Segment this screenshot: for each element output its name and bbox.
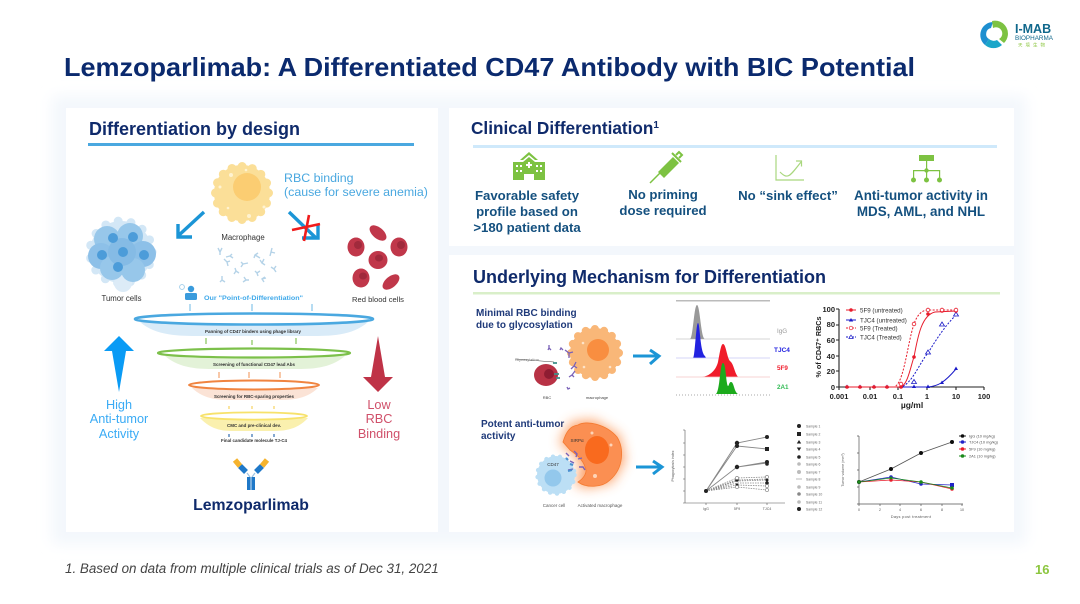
chart: percent CD47 positive RBCs: 40 bbox=[827, 352, 835, 361]
series: TJC4 untreated bbox=[847, 369, 956, 387]
diagram: RBC and macrophage: macrophage bbox=[586, 395, 609, 400]
diagram: cancer cell and activated macrophage: SIRPα bbox=[570, 438, 584, 443]
funnel stage 3: RBC-sparing screening bbox=[189, 380, 319, 400]
diagram: cancer cell and activated macrophage: CD47 bbox=[547, 462, 559, 467]
chart: percent CD47 positive RBCs: % of CD47⁺ RBCs bbox=[814, 317, 823, 377]
label: high anti-tumor activity: Activity bbox=[99, 427, 140, 441]
text: potent anti-tumor activity: Potent anti-tumor bbox=[481, 419, 564, 430]
diagram: RBC and macrophage bbox=[515, 328, 620, 400]
series: TJC4 treated bbox=[847, 315, 956, 387]
series: 5F9 untreated bbox=[847, 311, 956, 387]
heading: differentiation by design: Differentiation by design bbox=[89, 119, 300, 139]
text: minimal RBC binding: due to glycosylation bbox=[476, 320, 573, 331]
label: low RBC binding: Binding bbox=[358, 427, 400, 441]
chart: phagocytosis index bbox=[671, 430, 785, 511]
chart legend: phagocytosis samples: Sample 6 bbox=[806, 462, 820, 466]
label: tumor cells: Tumor cells bbox=[101, 294, 142, 303]
chart legend: phagocytosis samples: Sample 3 bbox=[806, 440, 820, 444]
chart: phagocytosis index: IgG bbox=[703, 507, 709, 511]
panel: differentiation by design bbox=[66, 108, 438, 532]
funnel stage 4: CMC: CMC and pre-clinical dev. bbox=[227, 423, 282, 429]
funnel bbox=[135, 304, 373, 444]
chart legend: phagocytosis samples: Sample 11 bbox=[806, 500, 822, 504]
chart: phagocytosis index: Phagocytosis index bbox=[671, 450, 675, 481]
logo: I-MAB Biopharma bbox=[980, 21, 1053, 48]
chart legend: phagocytosis samples: Sample 12 bbox=[806, 508, 822, 512]
chart: tumor growth: 10 bbox=[960, 508, 964, 512]
label: red blood cells: Red blood cells bbox=[352, 295, 404, 304]
diagram: RBC and macrophage: Glycosylation bbox=[515, 357, 539, 362]
chart: tumor growth: 0 bbox=[858, 508, 860, 512]
label: macrophage: Macrophage bbox=[221, 233, 265, 242]
text: anti-tumor activity: MDS, AML, and NHL bbox=[857, 204, 985, 219]
chart legend: tumor growth: IgG (10 mg/kg) bbox=[969, 434, 996, 438]
text: minimal RBC binding: Minimal RBC binding bbox=[476, 308, 577, 319]
chart: flow cytometry histogram: 2A1 bbox=[777, 384, 789, 391]
arrow: to red blood cells, crossed out bbox=[289, 212, 320, 241]
chart legend: TJC4 (Treated) bbox=[860, 334, 902, 342]
chart: percent CD47 positive RBCs: 60 bbox=[827, 336, 835, 345]
chart: percent CD47 positive RBCs: 1 bbox=[925, 392, 929, 401]
chart legend: phagocytosis samples: Sample 2 bbox=[806, 432, 820, 436]
chart: percent CD47 positive RBCs: 0.001 bbox=[830, 392, 848, 401]
chart legend: phagocytosis samples: Sample 5 bbox=[806, 456, 820, 460]
title: Lemzoparlimab: A Differentiated CD47 Antibody with BIC Potential bbox=[64, 54, 915, 82]
chart: percent CD47 positive RBCs bbox=[814, 305, 990, 410]
panel: underlying mechanism bbox=[449, 255, 1014, 532]
panel: clinical differentiation bbox=[449, 108, 1014, 246]
chart: percent CD47 positive RBCs: 100 bbox=[978, 392, 990, 401]
funnel stage 1: panning bbox=[135, 314, 373, 336]
chart legend: phagocytosis samples: Sample 9 bbox=[806, 486, 820, 490]
text: anti-tumor activity: Anti-tumor activity in bbox=[854, 188, 988, 203]
funnel stage 1: panning: Panning of CD47 binders using phage library bbox=[205, 329, 301, 335]
logo: I-MAB Biopharma: 天境生物 bbox=[1018, 42, 1048, 48]
text: potent anti-tumor activity: activity bbox=[481, 431, 516, 442]
chart legend: tumor growth bbox=[959, 434, 999, 458]
chart legend: phagocytosis samples: Sample 4 bbox=[806, 448, 820, 452]
chart legend: 5F9 (untreated) bbox=[860, 308, 903, 314]
icon: tumor cells bbox=[88, 221, 156, 292]
logo: I-MAB Biopharma: I-MAB bbox=[1015, 22, 1051, 36]
icon: person with idea bbox=[180, 285, 197, 300]
chart: tumor growth: 6 bbox=[920, 508, 922, 512]
icon: syringe bbox=[650, 152, 682, 183]
text: favorable safety: profile based on bbox=[476, 204, 578, 219]
arrow: to histogram bbox=[633, 350, 659, 364]
text: no sink effect: No “sink effect” bbox=[738, 188, 838, 203]
funnel stage 3: RBC-sparing screening: Screening for RBC-sparing properties bbox=[214, 394, 294, 400]
chart legend: tumor growth: 2A1 (10 mg/kg) bbox=[969, 454, 996, 458]
series: 5F9 treated bbox=[847, 310, 956, 387]
heading: clinical differentiation: 1 bbox=[653, 120, 659, 131]
chart: percent CD47 positive RBCs: 0 bbox=[831, 383, 835, 392]
funnel stage 2: functional screening bbox=[158, 348, 350, 369]
chart legend: tumor growth: TJC4 (10 mg/kg) bbox=[969, 440, 999, 444]
chart: tumor growth: 2 bbox=[879, 508, 881, 512]
funnel stage 2: functional screening: Screening of functional CD47 lead Abs bbox=[213, 362, 295, 368]
label: lemzoparlimab: Lemzoparlimab bbox=[193, 497, 309, 514]
icon: macrophage bbox=[214, 165, 270, 221]
label: point of differentiation: Our "Point-of-Differentiation" bbox=[204, 295, 303, 302]
chart legend: TJC4 (untreated) bbox=[860, 318, 907, 324]
chart: tumor growth: Days post treatment bbox=[891, 514, 932, 519]
chart: tumor growth: Tumor volume (mm³) bbox=[841, 453, 845, 487]
chart: tumor growth: 4 bbox=[899, 508, 901, 512]
chart legend: phagocytosis samples: Sample 8 bbox=[806, 478, 820, 482]
chart legend bbox=[846, 308, 907, 342]
chart: flow cytometry histogram: TJC4 bbox=[774, 347, 790, 354]
page number: 16 bbox=[1035, 562, 1049, 577]
icon: free antibodies bbox=[218, 248, 276, 282]
logo: I-MAB Biopharma: BIOPHARMA bbox=[1015, 36, 1053, 42]
chart: percent CD47 positive RBCs: 0.01 bbox=[863, 392, 877, 401]
chart: flow cytometry histogram: 5F9 bbox=[777, 365, 788, 372]
text: no priming: No priming bbox=[628, 187, 698, 202]
chart legend: phagocytosis samples bbox=[796, 424, 822, 512]
label: low RBC binding: RBC bbox=[366, 412, 392, 426]
label: RBC binding: (cause for severe anemia) bbox=[284, 185, 428, 199]
diagram: cancer cell and activated macrophage bbox=[537, 423, 623, 508]
icon: hospital bbox=[513, 152, 545, 180]
icon: antibody bbox=[235, 460, 267, 490]
arrow: to tumor cells bbox=[178, 212, 204, 237]
icon: org tree bbox=[911, 155, 942, 182]
funnel stage 4: CMC bbox=[200, 412, 308, 431]
chart: flow cytometry histogram: IgG bbox=[777, 328, 787, 335]
chart: percent CD47 positive RBCs: 10 bbox=[952, 392, 960, 401]
chart: flow cytometry histogram bbox=[676, 300, 790, 395]
chart legend: 5F9 (Treated) bbox=[860, 326, 898, 332]
diagram: RBC and macrophage: RBC bbox=[543, 395, 551, 400]
text: favorable safety: Favorable safety bbox=[475, 188, 580, 203]
heading: clinical differentiation: Clinical Differentiation bbox=[471, 118, 653, 138]
arrow: to tumor data bbox=[636, 461, 662, 474]
funnel result: Final candidate molecule TJ-C4 bbox=[221, 438, 287, 444]
diagram: cancer cell and activated macrophage: Activated macrophage bbox=[578, 503, 623, 508]
chart legend: phagocytosis samples: Sample 10 bbox=[806, 492, 822, 496]
icon: red blood cells bbox=[348, 222, 408, 293]
chart legend: phagocytosis samples: Sample 7 bbox=[806, 470, 820, 474]
chart: percent CD47 positive RBCs: 80 bbox=[827, 320, 835, 329]
chart: tumor growth: 8 bbox=[941, 508, 943, 512]
arrow: high anti-tumor bbox=[104, 336, 134, 392]
label: high anti-tumor activity: High bbox=[106, 398, 132, 412]
label: low RBC binding: Low bbox=[367, 398, 391, 412]
chart: percent CD47 positive RBCs: 100 bbox=[822, 305, 835, 314]
chart: percent CD47 positive RBCs: 0.1 bbox=[893, 392, 903, 401]
chart: phagocytosis index: 5F9 bbox=[734, 507, 740, 511]
chart: percent CD47 positive RBCs: µg/ml bbox=[901, 400, 923, 410]
arrow: low RBC binding bbox=[363, 336, 393, 392]
footnote: 1. Based on data from multiple clinical trials as of Dec 31, 2021 bbox=[65, 561, 439, 576]
icon: flat line chart bbox=[776, 155, 804, 180]
heading: underlying mechanism: Underlying Mechanism for Differentiation bbox=[473, 267, 826, 287]
chart: tumor growth bbox=[841, 436, 964, 519]
text: favorable safety: >180 patient data bbox=[473, 220, 581, 235]
label: high anti-tumor activity: Anti-tumor bbox=[90, 412, 149, 426]
chart: phagocytosis index: TJC4 bbox=[763, 507, 771, 511]
chart legend: tumor growth: 5F9 (10 mg/kg) bbox=[969, 446, 996, 452]
label: RBC binding: RBC binding bbox=[284, 171, 354, 185]
chart legend: phagocytosis samples: Sample 1 bbox=[806, 424, 820, 428]
text: no priming: dose required bbox=[619, 203, 707, 218]
chart: percent CD47 positive RBCs: 20 bbox=[827, 367, 835, 376]
diagram: cancer cell and activated macrophage: Cancer cell bbox=[543, 503, 565, 508]
